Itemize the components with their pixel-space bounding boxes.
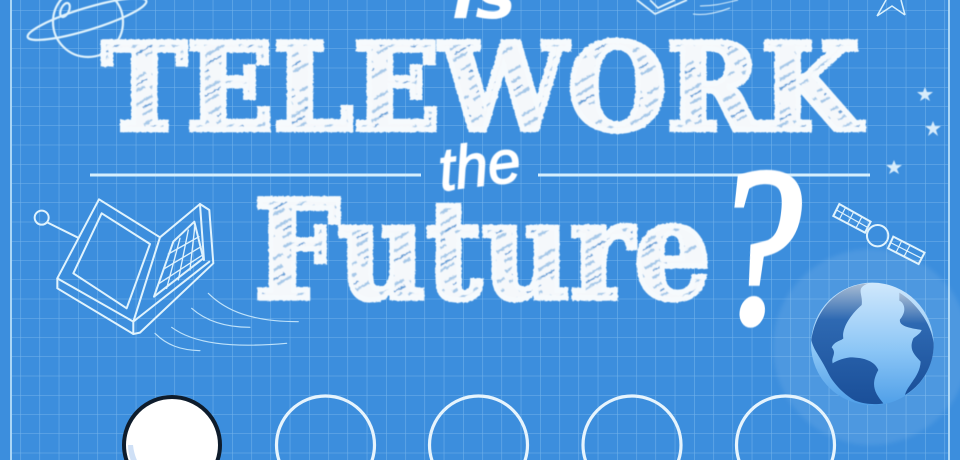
question mark: ?: [710, 122, 816, 372]
progress circle 2: [276, 396, 374, 460]
divider left: [90, 174, 421, 176]
progress circle 3: [430, 396, 528, 460]
icon: outline star: [877, 0, 905, 16]
title word: TELEWORK: TELEWORK: [102, 18, 864, 158]
progress circle 4: [583, 396, 681, 460]
progress circle 1 (active): [124, 397, 220, 460]
divider right: [538, 174, 870, 176]
icon: stars: [886, 87, 941, 174]
icon: globe: [811, 283, 934, 405]
title word: Future: Future: [254, 171, 711, 331]
icon: satellite: [833, 204, 925, 264]
icon: laptop (top, cropped): [637, 0, 738, 15]
globe halo: [773, 249, 960, 445]
title word: the: the: [435, 127, 524, 204]
icon: flying laptop: [35, 199, 298, 351]
icon: planet: [24, 0, 150, 57]
progress circle 5: [736, 396, 834, 460]
